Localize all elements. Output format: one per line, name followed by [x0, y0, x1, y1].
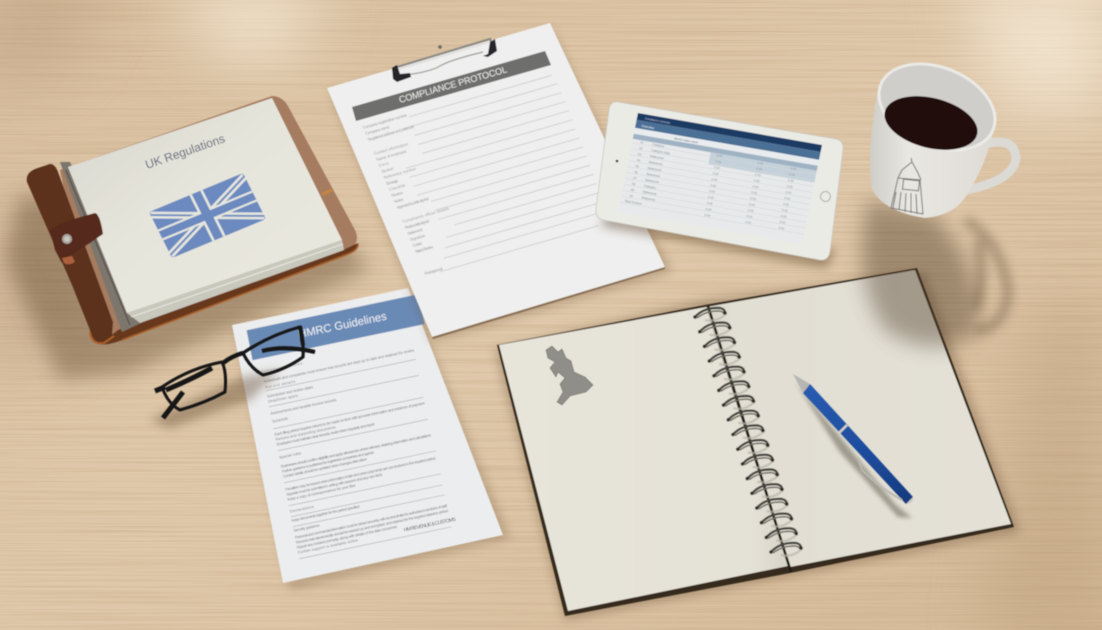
black glasses: [155, 326, 315, 418]
tablet screen: Reference: [647, 166, 662, 172]
body text lines: Declarations: [289, 505, 314, 514]
tablet screen: 0.00: [715, 159, 722, 164]
form labels: Notes: [393, 197, 404, 204]
tablet screen: Reference: [650, 154, 664, 160]
tablet screen: Reference: [646, 172, 661, 178]
tablet with table: [596, 102, 843, 260]
tablet screen: Reference: [645, 178, 660, 184]
tablet screen: 0.00: [783, 202, 790, 207]
tablet shadow: [600, 210, 836, 268]
coffee: [879, 87, 983, 159]
form labels: Review: [390, 190, 404, 198]
form labels: Compliance officer details: [401, 206, 449, 224]
glasses shadow: [150, 370, 280, 428]
metal clip: [392, 39, 497, 82]
body text lines: Special rules: [279, 451, 302, 460]
table header: [633, 134, 818, 171]
spiral notebook: [497, 268, 1014, 616]
binder page stack: [127, 240, 344, 323]
binder spine: [27, 164, 113, 344]
tablet screen: 0.00: [710, 183, 717, 188]
tablet screen: 0.00: [747, 208, 754, 213]
form labels: Company registration number: [362, 112, 408, 130]
body text lines: Further guidance is published for registered companies and agents: [282, 451, 374, 474]
body text lines: Businesses should confirm eligibility and apply allowances where relevant, retaining information and calculations: [281, 433, 431, 469]
left lens: [162, 362, 226, 410]
tablet screen: 0.00: [753, 178, 760, 183]
tablet screen: 09: [630, 188, 635, 192]
tablet screen: 0.00: [709, 189, 716, 194]
tablet screen: 0.00: [745, 220, 752, 225]
form labels: Checklist: [388, 182, 407, 192]
tablet screen: 0.00: [714, 165, 721, 170]
tablet screen: Category: [652, 142, 665, 148]
binder shadow: [6, 195, 370, 380]
form labels: Company name: [364, 124, 391, 136]
tablet screen: 0.00: [782, 208, 789, 213]
tablet screen: Reference: [642, 190, 657, 196]
form labels: Contact: [412, 240, 423, 248]
body text lines: Each filing period requires returns to be made on time with accurate information and evidence of payment: [274, 401, 426, 437]
tablet screen: 0.00: [779, 220, 786, 225]
form labels: Name of employee: [375, 148, 408, 162]
tablet screen: Total Amount: [624, 199, 642, 206]
form labels: Registered address and postcode: [367, 124, 416, 142]
mug handle: [967, 142, 1016, 190]
tablet screen: Compliance summary: [645, 116, 671, 125]
body text lines: Further support is available online: [298, 538, 358, 555]
tablet screen: 07: [633, 176, 637, 180]
form labels: [362, 112, 472, 276]
body text lines: [262, 337, 457, 556]
mug body: [870, 90, 997, 218]
tablet screen: Category data: [651, 148, 671, 155]
body text lines: Penalties may be issued when information is late and when payments are not received in the required period: [285, 456, 436, 492]
tablet screen: Category: [644, 184, 657, 190]
tablet screen: 0.00: [789, 172, 796, 177]
body text lines: Introductory notes: [262, 361, 303, 374]
tablet screen: 0.00: [784, 196, 791, 201]
title: UK Regulations: UK Regulations: [143, 131, 227, 172]
tablet screen: 0.00: [750, 196, 757, 201]
form labels: Date: [378, 160, 391, 168]
pen shadow: [795, 382, 912, 518]
tablet screen: 01: [640, 140, 644, 145]
body text lines: HM REVENUE & CUSTOMS: [403, 517, 457, 533]
tablet screen: Reference: [641, 196, 656, 202]
tablet screen: Reference: [648, 160, 663, 166]
tablet screen: 0.00: [711, 177, 718, 182]
spiral rings: [693, 308, 803, 556]
HMRC guidelines shadow: [235, 300, 510, 590]
mug rim: [864, 46, 1010, 168]
tablet screen: 0.00: [746, 214, 753, 219]
blue pen: [793, 374, 913, 504]
tablet screen: 0.00: [704, 213, 711, 218]
tablet screen: 0.00: [780, 214, 787, 219]
body text lines: Individuals and companies must ensure that records are kept up to date and retained for review: [264, 348, 415, 384]
body text lines: Records held electronically should be backed up and encrypted, and retained for the required statutory period: [296, 509, 448, 545]
form labels: Review date signed: [404, 218, 430, 230]
form labels: Contact information: [373, 141, 409, 156]
body text lines: Record details: [265, 380, 296, 390]
body text lines: Submission and review dates: [267, 385, 314, 399]
tablet screen: 0.00: [778, 226, 785, 231]
binder metal hinge: [60, 162, 143, 332]
Big Ben sketch: [891, 158, 923, 214]
form labels: Section: [380, 166, 394, 174]
body text lines: Returns and supporting documents: [275, 425, 336, 442]
form labels: Signature: [409, 233, 427, 242]
notebook cover: [497, 268, 1014, 616]
heading text: HMRC Guidelines: [297, 311, 388, 341]
tablet screen: 0.00: [706, 201, 713, 206]
sheet contents: [362, 70, 615, 276]
table rows: [620, 143, 816, 234]
form labels: Approved by, date signed: [396, 196, 430, 210]
tablet screen: 0.00: [749, 202, 756, 207]
form labels: Group: [385, 178, 399, 186]
binder strap with snap: [50, 213, 103, 264]
navy title bar: [637, 113, 822, 152]
tablet screen: 10: [629, 194, 634, 198]
tablet screen: Overview: [641, 124, 655, 130]
form labels: Final approval: [423, 266, 444, 276]
leather binder: UK Regulations: [27, 96, 358, 345]
body text lines: Personal and commercial information must be stored securely, with access limited to authorised members of staff: [295, 504, 448, 540]
tablet screen: 0.00: [756, 166, 763, 171]
tablet screen: 0.00: [790, 166, 797, 171]
right lens: [243, 327, 303, 375]
tablet screen: 02: [639, 146, 643, 151]
tablet screen: 0.00: [755, 172, 762, 177]
tablet screen: 0.00: [712, 171, 719, 176]
body text lines: Security guidance: [293, 523, 320, 533]
tablet screen: 0.00: [708, 195, 715, 200]
form labels: Statement: [407, 227, 424, 236]
binder cover: [60, 96, 357, 345]
tablet screen: 0.00: [716, 153, 723, 158]
body text lines: Keep documents together for the period specified: [291, 505, 360, 523]
form labels: Status, Review: [414, 244, 434, 254]
doc contents: [247, 294, 464, 560]
header band: [352, 51, 551, 121]
document: HMRC Guidelines: [232, 288, 503, 583]
tablet screen: 03: [638, 152, 642, 157]
notebook shadow: [495, 272, 1020, 620]
tablet screen: 0.00: [705, 207, 712, 212]
coffee mug with Big Ben sketch: [864, 46, 1016, 218]
left page: [499, 307, 788, 611]
body text lines: Appeals must be submitted in writing with reasons and any new facts: [286, 473, 383, 497]
body text lines: Assessments and taxable income records: [270, 398, 337, 416]
body text lines: Schedule: [272, 417, 288, 424]
spine: [708, 306, 791, 572]
header text: COMPLIANCE PROTOCOL: [398, 64, 508, 105]
body text lines: Employers must maintain clear records, review them regularly and report: [276, 422, 376, 447]
tablet screen: 0.00: [788, 178, 795, 183]
tablet screen: 0.00: [751, 190, 758, 195]
tablet screen: Review status report: [674, 136, 699, 144]
body text lines: Keep a copy of correspondence for your files: [287, 484, 356, 502]
body text lines: Contact details should be updated when changes take place: [283, 457, 367, 479]
silver UK map pin: [546, 346, 593, 405]
tablet screen: 08: [632, 182, 636, 186]
clipboard sheet: Compliance Protocol: [327, 23, 665, 339]
blue band heading: [247, 294, 425, 360]
tablet screen: 05: [635, 164, 640, 168]
binder top page: [68, 98, 342, 313]
tablet screen: 0.00: [785, 190, 792, 195]
tablet screen: 0.00: [752, 184, 759, 189]
body text lines: Report any incident promptly, along with details of the data concerned: [297, 525, 397, 550]
rule lines: [266, 359, 451, 559]
tablet screen: [618, 113, 822, 244]
temple arms: [262, 348, 315, 352]
body text lines: Deadlines apply: [268, 394, 299, 404]
compliance sheet shadow: [330, 30, 672, 342]
tablet screen: 0.00: [757, 161, 764, 166]
form labels: Reference number: [383, 166, 417, 180]
nav bar: [635, 120, 821, 160]
tablet screen: 06: [634, 170, 638, 174]
tablet screen: 0.00: [786, 184, 793, 189]
form rule lines: [379, 75, 615, 272]
tablet screen: 04: [636, 158, 641, 163]
mug shadow on desk and notebook: [862, 200, 1008, 346]
Union Jack stamp: [149, 173, 266, 258]
right page: [706, 270, 1011, 567]
